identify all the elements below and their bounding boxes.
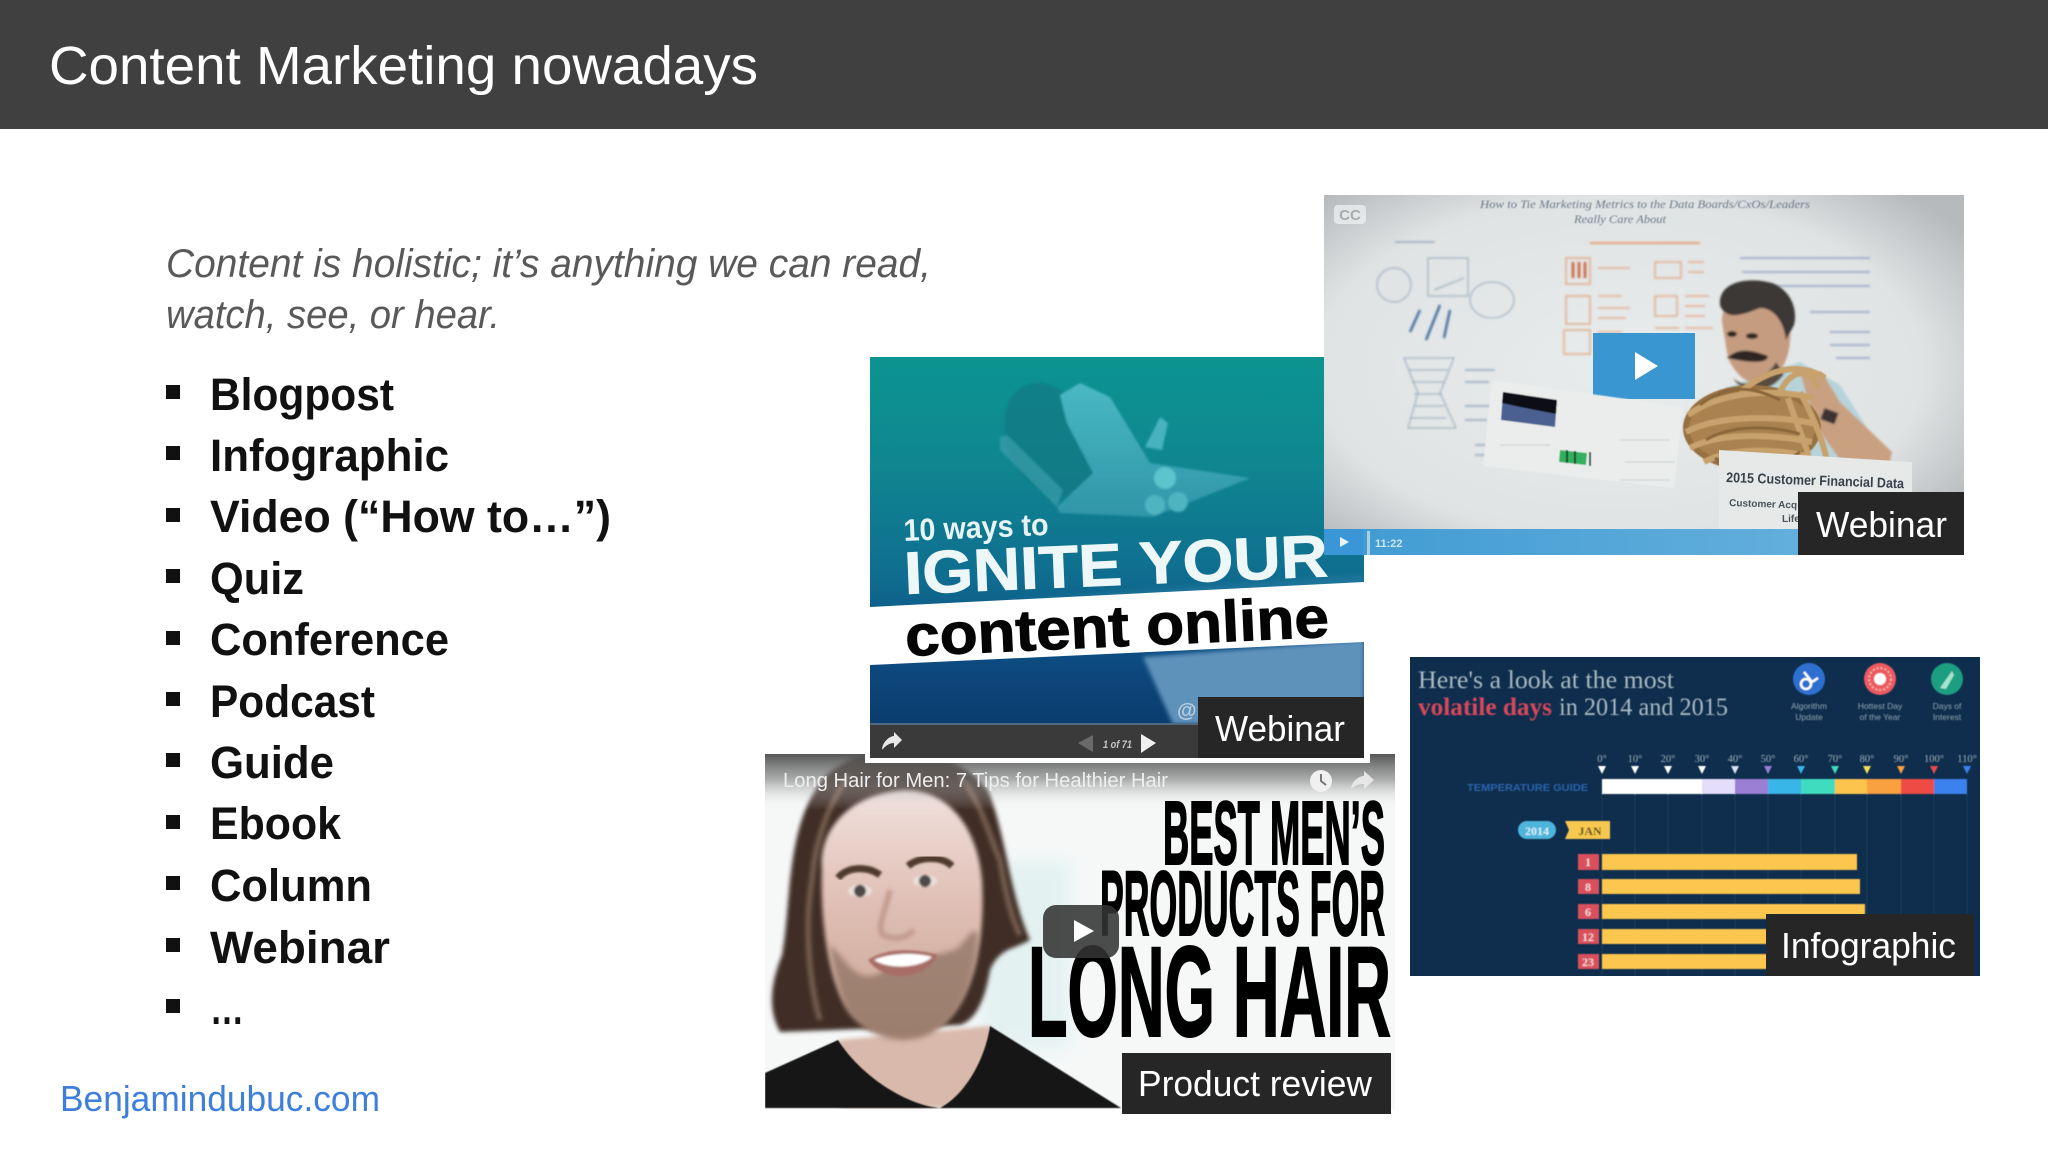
label: infographic: Infographic bbox=[1781, 925, 1956, 966]
temperature guide: 90° bbox=[1894, 754, 1908, 765]
label: infographic bbox=[1766, 914, 1974, 976]
bar chart of volatile days bbox=[1578, 854, 1865, 969]
panel: whiteboard webinar video screenshot bbox=[1324, 195, 1964, 555]
content type bullet list: Podcast bbox=[210, 676, 375, 727]
infographic legend icons: Update bbox=[1795, 712, 1823, 722]
panel: product review video screenshot bbox=[765, 749, 1395, 1109]
label: webinar (slide deck): Webinar bbox=[1215, 708, 1345, 749]
customer data box: Life bbox=[1782, 514, 1800, 525]
temperature guide: 110° bbox=[1957, 754, 1977, 765]
slide: BEST MEN’S bbox=[1163, 784, 1385, 884]
bar chart of volatile days: 1 bbox=[1585, 855, 1591, 869]
content type bullet list: Column bbox=[210, 860, 372, 911]
whiteboard title: How to Tie Marketing Metrics to the Data Boards/CxOs/Leaders bbox=[1479, 197, 1810, 211]
thumbnail headline bbox=[1032, 800, 1390, 1038]
temperature guide: 80° bbox=[1860, 754, 1874, 765]
video title: Long Hair for Men: 7 Tips for Healthier Hair bbox=[783, 770, 1168, 792]
control bar bbox=[870, 723, 1198, 725]
icon: closed captions bbox=[1334, 205, 1366, 224]
panel: infographic screenshot bbox=[1410, 657, 1980, 976]
label: product review bbox=[1122, 1053, 1391, 1114]
bar chart of volatile days: 12 bbox=[1582, 930, 1594, 944]
customer data box: 2015 Customer Financial Data bbox=[1726, 469, 1905, 491]
content type bullet list: Quiz bbox=[210, 553, 304, 604]
label: webinar (whiteboard) bbox=[1798, 492, 1964, 555]
icon: clock and share bbox=[1310, 770, 1374, 792]
year and month tags bbox=[1518, 821, 1610, 839]
temperature guide: TEMPERATURE GUIDE bbox=[1467, 782, 1588, 794]
content type bullet list: Infographic bbox=[210, 430, 449, 481]
temperature guide: 30° bbox=[1695, 754, 1709, 765]
slide: PRODUCTS FOR bbox=[1100, 853, 1385, 955]
year and month tags: JAN bbox=[1578, 824, 1602, 838]
panel: slide deck webinar screenshot bbox=[865, 352, 1370, 763]
thumbnail headline: LONG HAIR bbox=[1028, 921, 1391, 1064]
infographic legend icons: Interest bbox=[1933, 712, 1962, 722]
intro text bbox=[166, 242, 931, 337]
temperature guide: 10° bbox=[1628, 754, 1642, 765]
content type bullet list: Conference bbox=[210, 614, 449, 665]
content type bullet list: Webinar bbox=[210, 922, 390, 973]
infographic heading bbox=[1418, 667, 1728, 721]
year and month tags: 2014 bbox=[1525, 824, 1549, 838]
icon: closed captions: CC bbox=[1339, 207, 1361, 224]
text: 10 ways to: 10 ways to bbox=[903, 507, 1049, 548]
title: Content Marketing nowadays bbox=[49, 36, 758, 96]
video top shade bbox=[765, 754, 1395, 810]
text: content online: content online bbox=[904, 585, 1330, 669]
intro text: Content is holistic; it’s anything we can read, bbox=[166, 242, 931, 286]
infographic legend icons: Algorithm bbox=[1791, 701, 1827, 711]
content type bullet list: Ebook bbox=[210, 798, 342, 849]
temperature guide: 70° bbox=[1828, 754, 1842, 765]
bar chart of volatile days: 6 bbox=[1585, 905, 1591, 919]
temperature guide: 40° bbox=[1728, 754, 1742, 765]
whiteboard sketches bbox=[1377, 242, 1870, 455]
temperature guide: 100° bbox=[1924, 754, 1944, 765]
content type bullet list: Blogpost bbox=[210, 369, 394, 420]
label: product review: Product review bbox=[1138, 1063, 1373, 1104]
white frame bbox=[865, 352, 1370, 763]
temperature guide: 0° bbox=[1597, 754, 1607, 765]
label: webinar (slide deck) bbox=[1198, 697, 1364, 758]
temperature guide: 50° bbox=[1761, 754, 1775, 765]
content type bullet list: Guide bbox=[210, 737, 334, 788]
bar chart of volatile days: 8 bbox=[1585, 880, 1591, 894]
panel: slide deck webinar screenshot: @r bbox=[1177, 700, 1205, 722]
temperature guide bbox=[1467, 754, 1977, 976]
bar chart of volatile days: 23 bbox=[1582, 955, 1594, 969]
icon: space shuttle bbox=[1000, 382, 1249, 518]
icon: play button bbox=[1043, 905, 1119, 958]
whiteboard title: Really Care About bbox=[1573, 212, 1667, 226]
content type bullet list bbox=[166, 369, 611, 1034]
header bar bbox=[0, 0, 2048, 129]
customer data box bbox=[1719, 450, 1912, 529]
portrait of presenter bbox=[772, 749, 1030, 1108]
infographic legend icons: Days of bbox=[1933, 701, 1962, 711]
rope coil bbox=[1686, 369, 1830, 475]
infographic legend icons bbox=[1791, 663, 1963, 722]
video progress bar bbox=[1324, 529, 1798, 555]
temperature guide: 60° bbox=[1794, 754, 1808, 765]
infographic heading: volatile days bbox=[1418, 694, 1552, 721]
whiteboard title bbox=[1479, 197, 1810, 226]
presenter with rope bbox=[1720, 280, 1892, 472]
dark t-shirt bbox=[765, 1026, 1121, 1108]
play box bbox=[1593, 333, 1695, 399]
infographic legend icons: of the Year bbox=[1860, 712, 1900, 722]
content type bullet list: Video (“How to…”) bbox=[210, 491, 611, 542]
held report sheet bbox=[1484, 392, 1674, 487]
panel: slide deck webinar screenshot: 1 of 71 bbox=[1103, 739, 1132, 751]
intro text: watch, see, or hear. bbox=[166, 293, 500, 337]
content type bullet list: … bbox=[210, 983, 244, 1034]
infographic heading: Here's a look at the most bbox=[1418, 667, 1674, 694]
infographic heading: in 2014 and 2015 bbox=[1559, 694, 1728, 721]
temperature guide: 20° bbox=[1661, 754, 1675, 765]
white diagonal band bbox=[870, 582, 1364, 665]
label: webinar (whiteboard): Webinar bbox=[1816, 504, 1947, 545]
website link: Benjamindubuc.com bbox=[60, 1078, 380, 1119]
video progress bar: 11:22 bbox=[1375, 538, 1403, 550]
infographic legend icons: Hottest Day bbox=[1858, 701, 1903, 711]
customer data box: Customer Acq bbox=[1729, 498, 1797, 511]
text: ignite your: IGNITE YOUR bbox=[903, 522, 1329, 607]
